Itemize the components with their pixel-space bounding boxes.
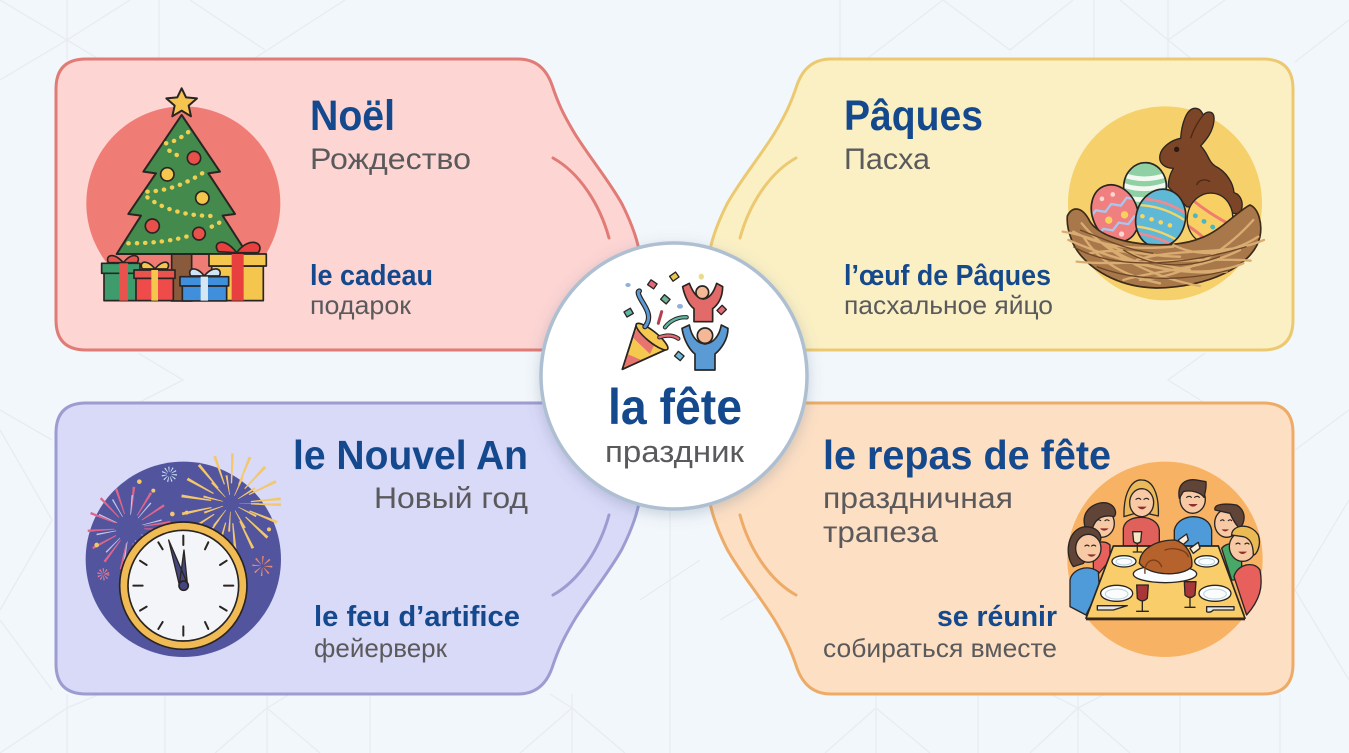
right front man bbox=[1234, 565, 1261, 615]
heading: Pâques: Pâques bbox=[844, 92, 983, 140]
heading: le Nouvel An: le Nouvel An bbox=[293, 432, 528, 478]
translation: пасхальное яйцо: пасхальное яйцо bbox=[844, 290, 1053, 320]
left woman 2 bbox=[1093, 542, 1110, 580]
roast turkey bbox=[1139, 534, 1200, 574]
egg yellow bbox=[1186, 192, 1234, 240]
card shape yellow bbox=[710, 59, 1293, 350]
right man bbox=[1222, 544, 1242, 580]
table bbox=[1086, 546, 1245, 618]
nest bbox=[1067, 205, 1261, 288]
icon: clock and fireworks bbox=[86, 462, 281, 657]
hub translation: праздник: праздник bbox=[605, 434, 744, 469]
icon: chocolate bunny and eggs in nest bbox=[1063, 106, 1264, 300]
left front woman bbox=[1070, 568, 1099, 615]
icon: family at festive table bbox=[1067, 462, 1263, 657]
cheering people and cone bbox=[622, 283, 728, 370]
egg blue bbox=[1134, 188, 1187, 244]
clock hands bbox=[169, 540, 187, 585]
panel: le repas de fête bbox=[710, 403, 1293, 694]
confetti bbox=[624, 272, 726, 361]
hub heading: la fête: la fête bbox=[608, 379, 742, 435]
icon: christmas tree with gifts bbox=[86, 88, 280, 301]
central hub: la fête bbox=[541, 243, 807, 509]
wine glasses bbox=[1097, 532, 1234, 612]
streamers bbox=[638, 291, 687, 339]
term: le feu d'artifice: le feu d’artifice bbox=[314, 601, 520, 633]
panel: Pâques bbox=[710, 59, 1293, 350]
card shape purple bbox=[56, 403, 639, 694]
faces bbox=[1085, 496, 1249, 546]
translation: собираться вместе: собираться вместе bbox=[823, 633, 1057, 663]
back right man bbox=[1174, 517, 1212, 546]
heading: le repas de fête: le repas de fête bbox=[823, 432, 1111, 478]
connector arc bbox=[553, 158, 609, 238]
translation: фейерверк: фейерверк bbox=[314, 633, 448, 663]
card shape red bbox=[56, 59, 639, 350]
translation: подарок: подарок bbox=[310, 290, 412, 320]
back left woman bbox=[1124, 480, 1158, 517]
term: se réunir: se réunir bbox=[937, 601, 1057, 633]
translation: праздничная трапеза: праздничная bbox=[823, 482, 1013, 515]
term: le cadeau: le cadeau bbox=[310, 260, 433, 292]
translation: Рождество: Рождество bbox=[310, 143, 471, 176]
egg pink bbox=[1090, 184, 1138, 240]
panel: Noël bbox=[56, 59, 639, 350]
translation: Пасха: Пасха bbox=[844, 143, 930, 176]
gift bows and boxes bbox=[102, 242, 266, 301]
panel: le Nouvel An bbox=[56, 403, 639, 694]
translation: Новый год: Новый год bbox=[374, 482, 528, 515]
connector arc bbox=[740, 515, 796, 595]
connector arc bbox=[740, 158, 796, 238]
hub circle bbox=[541, 243, 807, 509]
term: l'œuf de Pâques: l’œuf de Pâques bbox=[844, 260, 1051, 292]
connector arc bbox=[553, 515, 609, 595]
heading: Noël: Noël bbox=[310, 92, 395, 140]
icon: party popper and cheering people bbox=[622, 272, 728, 370]
translation: праздничная трапеза: трапеза bbox=[823, 516, 938, 549]
egg green bbox=[1122, 162, 1168, 207]
card shape orange bbox=[710, 403, 1293, 694]
